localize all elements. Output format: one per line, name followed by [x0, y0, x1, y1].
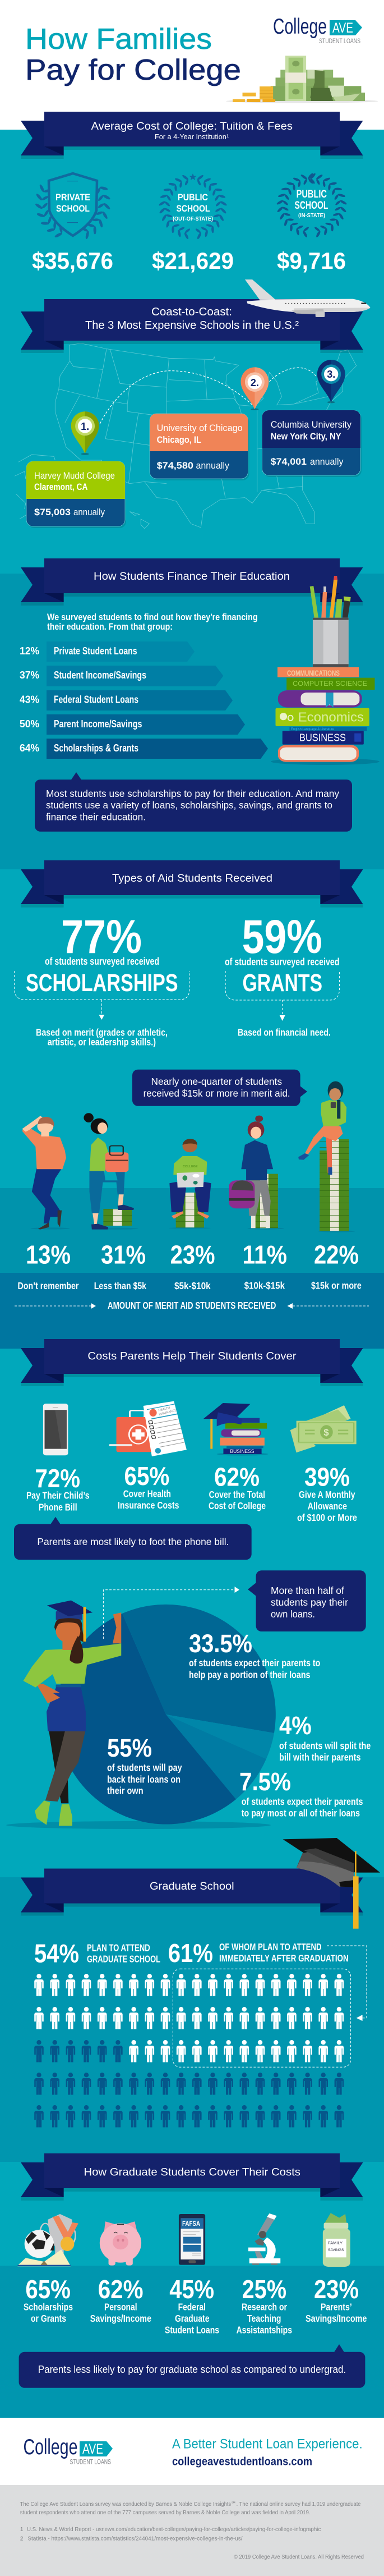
stat header: plan to attend graduate school: 54% [34, 1939, 79, 1968]
stat: health insurance: Insurance Costs [118, 1500, 179, 1511]
panel: Harvey Mudd card: Claremont, CA [34, 482, 87, 492]
heading ribbon: how students finance [21, 558, 363, 606]
icon: pin 1: 1. [81, 421, 89, 432]
callout: phone bill: Parents are most likely to foot the phone bill. [37, 1536, 229, 1547]
bar: scholarships and grants: Scholarships & Grants [54, 742, 138, 754]
stat: scholarships or grants [24, 2275, 73, 2324]
footnotes and disclaimer: 2 [20, 2536, 24, 2542]
stat: 33.5 percent: of students expect their parents to [189, 1657, 320, 1669]
stat: research or teaching [237, 2275, 292, 2336]
stat: 10k to 15k [242, 1240, 287, 1291]
person: student sitting on tall stack [298, 1081, 355, 1232]
bar: scholarships and grants: 64% [20, 742, 39, 754]
stat: personal savings [90, 2275, 151, 2324]
panel: University of Chicago card: $74,580 [157, 460, 193, 471]
callout: scholarships note: students use a variety of loans, scholarships, savings, and grants to [46, 800, 332, 811]
stat header: immediately after graduation [168, 1938, 349, 1968]
stat: 10k to 15k: 11% [242, 1240, 287, 1269]
bar: federal student loans: Federal Student Loans [54, 694, 138, 705]
icon: pin 2 [240, 367, 269, 410]
icon: pencil cup on book stack: BUSINESS [299, 732, 346, 744]
map of the United States [15, 343, 357, 529]
heading ribbon: average cost of college [21, 112, 363, 159]
stat header: immediately after graduation: OF WHOM PLAN TO ATTEND [219, 1941, 322, 1952]
panel: Harvey Mudd card [26, 461, 126, 528]
callout: scholarships note [35, 772, 352, 832]
panel: private school badge [32, 173, 113, 274]
stat: allowance: 39% [304, 1463, 350, 1492]
stat: scholarships or grants: Scholarships [24, 2302, 73, 2313]
stat header: plan to attend graduate school [34, 1939, 160, 1968]
callout: more than half [248, 1570, 366, 1631]
person: student scratching head [22, 1116, 70, 1230]
stat: 5k to 10k [170, 1240, 215, 1291]
footnotes and disclaimer: Statista - https://www.statista.com/statistics/244041/most-expensive-colleges-in-the-us/ [27, 2536, 243, 2542]
footer logo [24, 2435, 113, 2466]
panel: public school out-of-state badge: PUBLIC [178, 192, 208, 203]
panel: private school badge: $35,676 [32, 247, 113, 274]
stat: total cost: 62% [214, 1463, 260, 1492]
stat: research or teaching: 25% [242, 2275, 286, 2304]
panel: University of Chicago card [150, 414, 249, 480]
callout: more than half: students pay their [271, 1597, 348, 1608]
stat: 4 percent: bill with their parents [279, 1752, 361, 1763]
slice: 4 percent [166, 1715, 274, 1759]
footnotes and disclaimer [20, 2501, 364, 2560]
icon: airplane [245, 279, 371, 317]
icon: smartphone [43, 1404, 68, 1455]
panel: public school in-state badge: SCHOOL [295, 200, 329, 212]
panel: Columbia University card: New York City, NY [271, 432, 341, 442]
stat: scholarships or grants: 65% [25, 2275, 71, 2304]
panel: scholarships stat: 77% [61, 910, 142, 963]
stat header: immediately after graduation: 61% [168, 1938, 213, 1968]
icon: graduation cap on books: BUSINESS [230, 1449, 255, 1455]
panel: Columbia University card: Columbia University [271, 420, 352, 430]
bar: student income [20, 666, 223, 686]
stat: health insurance: Cover Health [123, 1488, 171, 1500]
stat: don't remember: Don’t remember [18, 1280, 79, 1291]
heading ribbon: types of aid: Types of Aid Students Received [112, 873, 272, 884]
icon: health insurance kit and document [109, 1401, 187, 1456]
stat: 33.5 percent: 33.5% [189, 1629, 252, 1658]
footer tagline [172, 2436, 363, 2468]
stat: research or teaching: Research or [242, 2302, 287, 2313]
bar: parent income: Parent Income/Savings [54, 718, 142, 730]
stat: phone bill [26, 1464, 90, 1513]
icon: pin 3: 3. [327, 369, 335, 380]
panel: University of Chicago card: University of Chicago [157, 423, 243, 433]
panel: private school badge: SCHOOL [56, 203, 90, 214]
icon: pin 3 [317, 360, 345, 403]
stat: allowance [297, 1463, 357, 1523]
stat: 33.5 percent [189, 1629, 320, 1680]
bar: private student loans [20, 641, 195, 662]
panel: University of Chicago card: annually [196, 460, 229, 471]
stat: federal graduate loans: 45% [169, 2275, 214, 2304]
stat: less than 5k: Less than $5k [94, 1280, 146, 1291]
title: Pay for College [25, 54, 241, 86]
panel: grants stat: GRANTS [242, 969, 322, 997]
icon: pencil cup on book stack: COMPUTER SCIENCE [293, 681, 367, 687]
person: student with purple backpack [229, 1116, 284, 1230]
heading ribbon: average cost of college: For a 4-Year Institution¹ [155, 133, 229, 141]
icon: pencil cup on book stack [271, 576, 380, 765]
icon: dollar bills [290, 1405, 357, 1452]
stat: 55 percent: their own [107, 1785, 144, 1796]
arrow: dashed flight paths between pins [100, 368, 316, 424]
icon: graduation cap with tassel [283, 1838, 380, 1929]
icon: money pile and coins [226, 56, 378, 103]
icon: pencil cup on book stack: COMMUNICATIONS [287, 668, 340, 677]
text: $ [323, 1427, 329, 1438]
panel: grants stat [225, 910, 340, 1038]
icon: wreath with star [158, 173, 228, 240]
panel: public school out-of-state badge: SCHOOL [176, 203, 210, 214]
callout: nearly one-quarter: Nearly one-quarter of students [151, 1076, 282, 1087]
stat: total cost: Cover the Total [209, 1489, 265, 1500]
icon: family savings jar: SAVINGS [328, 2248, 344, 2252]
heading ribbon: average cost of college: Average Cost of College: Tuition & Fees [91, 121, 293, 132]
bar: federal student loans: 43% [20, 694, 39, 705]
logo: College Ave: College [273, 15, 327, 39]
stat: 15k or more [311, 1240, 362, 1291]
axis label: amount of merit aid: AMOUNT OF MERIT AID STUDENTS RECEIVED [108, 1300, 276, 1311]
footnotes and disclaimer: © 2019 College Ave Student Loans. All Rights Reserved [234, 2554, 364, 2560]
bar: parent income: 50% [20, 718, 39, 730]
panel: scholarships stat [15, 910, 189, 1048]
axis label: amount of merit aid [15, 1300, 369, 1311]
arrow: dashed bracket to merit note [15, 971, 189, 1020]
heading ribbon: coast to coast [21, 299, 363, 353]
heading ribbon: coast to coast: The 3 Most Expensive Schools in the U.S.² [85, 319, 299, 332]
panel: public school out-of-state badge [152, 173, 234, 274]
heading ribbon: costs parents help cover: Costs Parents Help Their Students Cover [87, 1351, 297, 1363]
stat: federal graduate loans: Graduate [175, 2313, 210, 2324]
panel: Columbia University card: $74,001 [271, 456, 307, 467]
label: college shirt: COLLEGE [183, 1165, 198, 1168]
icon: graduation cap on books [203, 1403, 268, 1456]
text block: survey intro: their education. From that group: [47, 621, 173, 632]
panel: grants stat: 59% [242, 910, 322, 963]
stat: less than 5k [94, 1240, 146, 1291]
heading ribbon: how students finance: How Students Finance Their Education [94, 571, 290, 583]
stat: parents savings: 23% [314, 2275, 359, 2304]
stats: parents help [26, 1461, 357, 1523]
stat: 55 percent: of students will pay [107, 1762, 182, 1773]
panel: Harvey Mudd card: $75,003 [34, 507, 71, 517]
panel: Harvey Mudd card: Harvey Mudd College [34, 471, 115, 481]
panel: scholarships stat: artistic, or leadership skills.) [48, 1037, 156, 1048]
text block: survey intro: We surveyed students to find out how they're financing [47, 612, 258, 622]
panel: private school badge: PRIVATE [55, 192, 90, 203]
footer logo: College [24, 2435, 77, 2459]
panel: scholarships stat: Based on merit (grades or athletic, [36, 1027, 168, 1038]
panel: scholarships stat: SCHOLARSHIPS [26, 969, 178, 997]
panel: University of Chicago card: Chicago, IL [157, 435, 201, 445]
icon: health insurance kit and document: INSURANCE [159, 1409, 177, 1417]
chart: merit aid percentages [18, 1240, 362, 1291]
illustration: graduate woman [24, 1601, 121, 1826]
footer logo: AVE [82, 2441, 103, 2457]
person: student with laptop [169, 1139, 211, 1229]
bar: scholarships and grants [20, 739, 268, 759]
title: How Families [25, 23, 212, 56]
logo: College Ave [273, 15, 362, 45]
stat: allowance: of $100 or More [297, 1512, 357, 1523]
stat: 10k to 15k: $10k-$15k [244, 1280, 285, 1291]
footer tagline: collegeavestudentloans.com [172, 2455, 312, 2468]
stat: parents savings: Savings/Income [306, 2313, 367, 2324]
callout: more than half: More than half of [271, 1585, 344, 1596]
stat: 4 percent: 4% [279, 1711, 312, 1740]
callout: scholarships note: Most students use scholarships to pay for their education. And many [46, 788, 339, 799]
text block: survey intro [47, 612, 258, 632]
footnotes and disclaimer: student respondents who attend one of the 777 campuses served by Barnes & Noble College and was fielded in April 2019. [20, 2509, 311, 2516]
icon: wreath [276, 172, 348, 238]
stat: scholarships or grants: or Grants [31, 2313, 66, 2324]
panel: scholarships stat: of students surveyed received [45, 956, 159, 967]
bar: student income: 37% [20, 670, 39, 681]
heading ribbon: types of aid [21, 860, 363, 907]
arrow: dashed pointer to callout [103, 1587, 239, 1639]
footnotes and disclaimer: 1 [20, 2526, 24, 2533]
icon: phone with FAFSA [179, 2214, 205, 2265]
stat: allowance: Give A Monthly [299, 1489, 355, 1500]
stat: personal savings: 62% [98, 2275, 144, 2304]
panel: Harvey Mudd card: annually [73, 507, 105, 517]
stat: 15k or more: 22% [314, 1240, 359, 1269]
stat header: plan to attend graduate school: PLAN TO ATTEND [87, 1942, 150, 1954]
stat: total cost [209, 1463, 266, 1511]
illustration: students on money stacks [22, 1081, 355, 1232]
panel: public school out-of-state badge: $21,629 [152, 247, 234, 274]
icon: phone with FAFSA: FAFSA [182, 2221, 200, 2227]
callout: parents less likely: Parents less likely to pay for graduate school as compared to undergrad. [38, 2364, 346, 2375]
heading ribbon: costs parents help cover [21, 1339, 363, 1386]
stat: 33.5 percent: help pay a portion of their loans [189, 1669, 311, 1680]
panel: public school in-state badge [276, 172, 348, 274]
panel: public school out-of-state badge: (OUT-OF-STATE) [173, 216, 213, 222]
stat: federal graduate loans [165, 2275, 219, 2336]
logo: College Ave: STUDENT LOANS [319, 38, 360, 45]
logo: College Ave: AVE [332, 20, 353, 36]
callout: nearly one-quarter [132, 1070, 307, 1106]
panel: public school in-state badge: (IN-STATE) [298, 212, 325, 219]
icon: pin 1 [71, 411, 99, 455]
footnotes and disclaimer: U.S. News & World Report - usnews.com/education/best-colleges/paying-for-college/articles/paying-for-college-infographic [27, 2526, 321, 2533]
stat: 7.5 percent [239, 1767, 363, 1819]
stat: parents savings: Parents’ [321, 2302, 352, 2313]
arrow: dashed pointer to people box [327, 1946, 367, 2021]
footer logo: STUDENT LOANS [70, 2459, 111, 2466]
stat: phone bill: 72% [35, 1464, 80, 1493]
callout: scholarships note: finance their education. [46, 812, 146, 823]
slice: 33.5 percent [122, 1605, 276, 1733]
heading ribbon: coast to coast: Coast-to-Coast: [151, 306, 232, 318]
stat: health insurance [118, 1461, 179, 1511]
row: mixed people [34, 2040, 344, 2062]
icon: pencil cup on book stack: English Language & Literature [291, 728, 335, 731]
stat header: immediately after graduation: IMMEDIATELY AFTER GRADUATION [219, 1952, 349, 1964]
icon: piggy bank [100, 2221, 141, 2266]
stat: 55 percent: 55% [107, 1734, 152, 1762]
bar: private student loans: 12% [20, 645, 39, 657]
stat: personal savings: Savings/Income [90, 2313, 151, 2324]
panel: grants stat: Based on financial need. [238, 1027, 331, 1038]
callout: parents less likely [19, 2344, 365, 2388]
stat: 55 percent: back their loans on [107, 1774, 181, 1785]
pie chart: who pays back loans [6, 1605, 276, 1829]
stat: personal savings: Personal [104, 2302, 137, 2313]
stat: 5k to 10k: $5k-$10k [174, 1280, 211, 1291]
stat: don't remember: 13% [26, 1240, 71, 1269]
panel: public school in-state badge: $9,716 [277, 247, 346, 274]
icon: trophy, soccer ball, medal and book [17, 2214, 78, 2266]
title [25, 23, 241, 86]
stat: 15k or more: $15k or more [311, 1280, 362, 1291]
icon: shield with laurels [34, 173, 112, 240]
callout: phone bill [14, 1517, 252, 1560]
stat: 7.5 percent: to pay most or all of their loans [242, 1808, 360, 1819]
footer tagline: A Better Student Loan Experience. [172, 2436, 363, 2451]
panel: public school in-state badge: PUBLIC [297, 189, 327, 200]
stat: phone bill: Pay Their Child’s [26, 1490, 90, 1501]
stat: federal graduate loans: Federal [178, 2302, 206, 2313]
stat: parents savings [306, 2275, 367, 2324]
stat: phone bill: Phone Bill [39, 1502, 77, 1513]
callout: more than half: own loans. [271, 1608, 315, 1620]
stat: total cost: Cost of College [209, 1500, 266, 1511]
chart: people pictogram [34, 1969, 351, 2127]
stat: don't remember [18, 1240, 79, 1291]
stat: less than 5k: 31% [101, 1240, 146, 1269]
heading ribbon: how graduate students cover costs [21, 2153, 363, 2201]
heading ribbon: how graduate students cover costs: How Graduate Students Cover Their Costs [84, 2167, 300, 2179]
bar: parent income [20, 714, 245, 735]
stat: 7.5 percent: 7.5% [239, 1767, 291, 1796]
panel: Columbia University card [262, 410, 362, 477]
bar: federal student loans [20, 690, 233, 711]
slice: 55 percent [57, 1614, 236, 1825]
heading ribbon: graduate school: Graduate School [150, 1881, 234, 1892]
panel: grants stat: of students surveyed received [225, 956, 340, 968]
arrow: dashed bracket to need note [225, 971, 340, 1021]
icon: pencil cup on book stack: Economics [298, 710, 364, 725]
person: student with backpack [84, 1113, 138, 1230]
stat: research or teaching: Teaching [247, 2313, 281, 2324]
heading ribbon: graduate school [21, 1869, 363, 1916]
bar: private student loans: Private Student Loans [54, 645, 137, 657]
icon: microscope [248, 2213, 280, 2265]
stat: federal graduate loans: Student Loans [165, 2325, 219, 2336]
chart: how students finance arrows [20, 641, 268, 759]
icon: pin 2: 2. [251, 377, 259, 388]
stat: 4 percent [279, 1711, 371, 1763]
callout: nearly one-quarter: received $15k or more in merit aid. [144, 1088, 290, 1099]
panel: Columbia University card: annually [310, 456, 344, 467]
icon: health insurance kit and document: HEALTH [158, 1406, 170, 1413]
stat: 5k to 10k: 23% [170, 1240, 215, 1269]
bar: student income: Student Income/Savings [54, 670, 146, 681]
slice: 7.5 percent [166, 1715, 266, 1799]
icon: family savings jar [323, 2213, 350, 2267]
stat: 55 percent [107, 1734, 182, 1796]
stat: research or teaching: Assistantships [237, 2325, 292, 2336]
pie labels [107, 1629, 371, 1819]
stat: health insurance: 65% [124, 1461, 169, 1491]
stat header: plan to attend graduate school: GRADUATE SCHOOL [87, 1954, 160, 1965]
icon: family savings jar: FAMILY [328, 2240, 343, 2245]
stat: allowance: Allowance [308, 1500, 347, 1511]
stats: graduate funding [24, 2275, 367, 2336]
